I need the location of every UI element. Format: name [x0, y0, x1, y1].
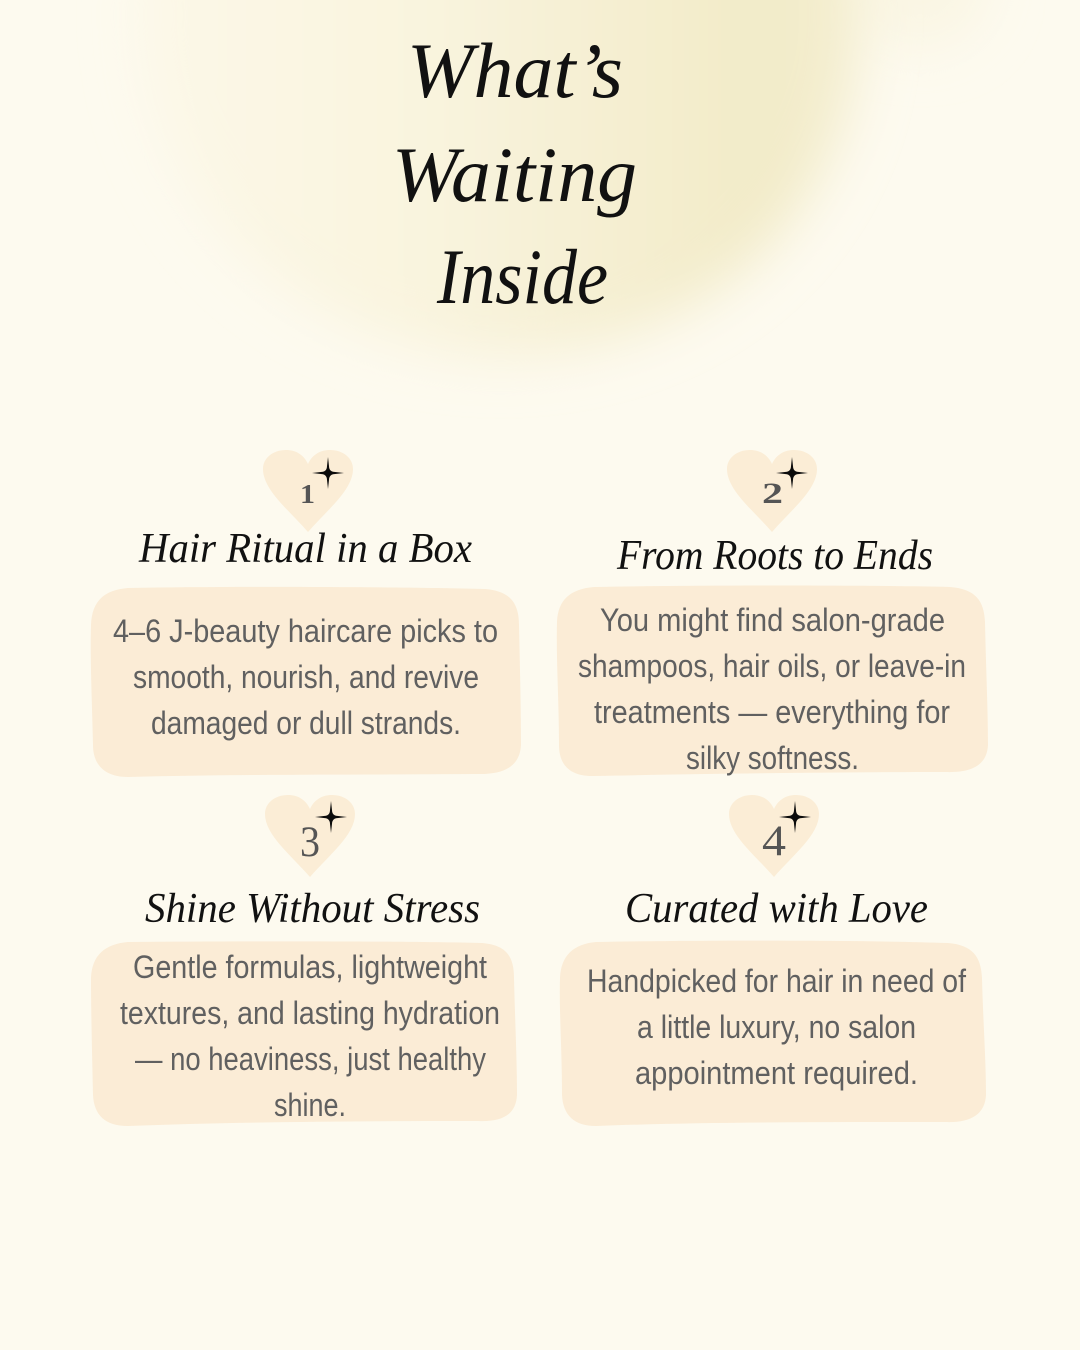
item 3: shine without stress	[91, 795, 517, 1126]
text card: damaged or dull strands.	[151, 705, 461, 741]
title: Waiting	[392, 131, 637, 218]
icon: heart with number 2	[727, 450, 817, 532]
decorative glow	[138, 0, 990, 357]
text card: silky softness.	[686, 740, 859, 776]
text card	[557, 586, 988, 776]
icon: heart with number 4	[729, 795, 819, 877]
item 1: hair ritual in a box	[91, 450, 521, 777]
text card: Gentle formulas, lightweight	[133, 949, 487, 985]
text card: You might find salon-grade	[600, 602, 945, 638]
text card: 4–6 J-beauty haircare picks to	[113, 613, 498, 649]
heading: Shine Without Stress	[145, 886, 480, 932]
text card: shine.	[274, 1087, 346, 1123]
text card	[91, 941, 517, 1126]
heading: From Roots to Ends	[616, 533, 933, 579]
icon: heart with number 1	[263, 450, 353, 532]
text card: — no heaviness, just healthy	[135, 1041, 486, 1077]
icon: heart with number 3: 3	[300, 819, 320, 866]
heading: Hair Ritual in a Box	[138, 526, 472, 572]
icon: heart with number 3	[265, 795, 355, 877]
title: What’s	[407, 27, 623, 114]
icon: heart with number 1: 1	[300, 479, 315, 509]
text card	[560, 941, 986, 1126]
item 4: curated with love	[560, 795, 986, 1126]
icon: heart with number 4: 4	[762, 818, 786, 865]
heading: Curated with Love	[625, 886, 928, 932]
text card: appointment required.	[635, 1055, 918, 1091]
text card: smooth, nourish, and revive	[133, 659, 479, 695]
text card: Handpicked for hair in need of	[587, 963, 966, 999]
text card: treatments — everything for	[594, 694, 950, 730]
title	[392, 27, 637, 320]
icon: heart with number 2: 2	[762, 477, 783, 510]
text card: a little luxury, no salon	[637, 1009, 916, 1045]
title: Inside	[436, 233, 608, 320]
item 2: from roots to ends	[557, 450, 988, 776]
text card: shampoos, hair oils, or leave-in	[578, 648, 966, 684]
text card	[91, 587, 521, 777]
text card: textures, and lasting hydration	[120, 995, 500, 1031]
